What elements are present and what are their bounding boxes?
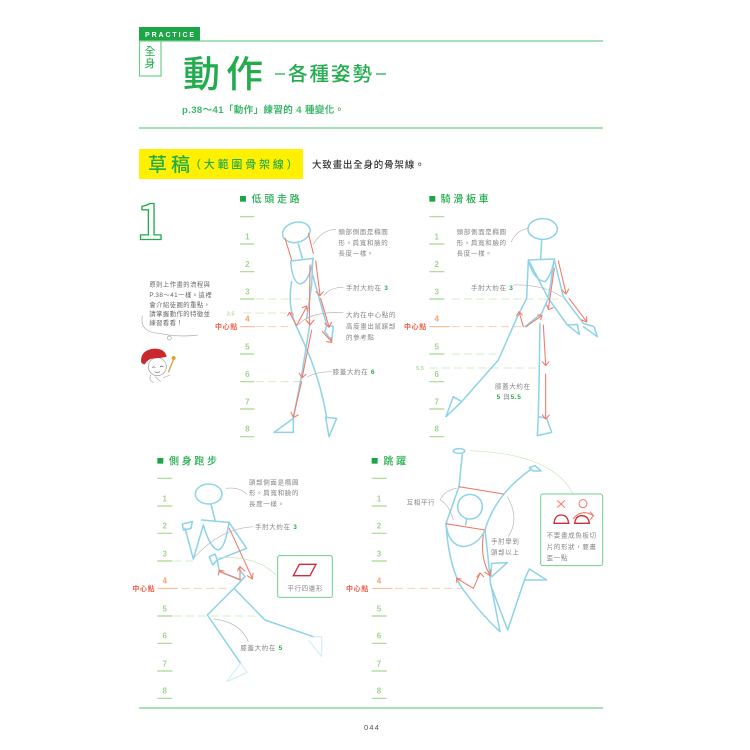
- heading: skateboard: 騎滑板車: [441, 193, 491, 206]
- leader lines: [193, 488, 277, 642]
- guide lines: [429, 299, 563, 368]
- ruler: 7: [162, 659, 167, 668]
- callout: shape tip: [541, 494, 603, 566]
- ruler: 7: [377, 659, 382, 668]
- annotation: elbow: [491, 536, 520, 556]
- annotation: groin: 高度畫出鼠蹊部: [346, 321, 396, 330]
- figure skeleton: [274, 219, 337, 437]
- ruler: [157, 478, 178, 698]
- red guide arrows: [517, 261, 587, 419]
- ruler: 6: [377, 632, 382, 641]
- annotation: head shape: [338, 227, 388, 258]
- title: 動作: [183, 54, 269, 95]
- ruler: [372, 478, 392, 698]
- ruler: 1: [377, 494, 382, 503]
- intro line: p.38～41「動作」練習的 4 種變化。: [182, 104, 345, 116]
- category tag: whole body: [140, 41, 161, 76]
- panel: jumping: [346, 449, 603, 698]
- heading: jump: [372, 455, 409, 468]
- ruler: 4: [245, 315, 250, 324]
- speech bubble text: 練習看看！: [149, 318, 183, 327]
- red guide arrows: [218, 528, 253, 580]
- category tag: whole body: 身: [144, 56, 156, 70]
- guide line: [395, 587, 463, 590]
- heading: running: 側身跑步: [169, 455, 220, 468]
- callout: parallelogram: [278, 556, 332, 597]
- speech bubble tail: [142, 316, 198, 340]
- annotation: head shape: 長度一樣。: [249, 499, 285, 508]
- section heading: draft: （大範圍骨架線）: [190, 157, 300, 171]
- ruler: 6: [162, 632, 167, 641]
- step number 1: 1: [136, 184, 164, 254]
- figure skeleton: [446, 449, 547, 632]
- panel: skateboarding: [404, 193, 597, 437]
- ruler: 8: [434, 425, 439, 434]
- label: center point: 中心點: [346, 584, 369, 593]
- annotation: parallel: 互相平行: [407, 497, 435, 506]
- panel: running sideways: [132, 455, 332, 698]
- annotation: head shape: 頭部側面是橢圓: [338, 227, 388, 236]
- annotation: groin: 大約在中心點的: [346, 310, 396, 319]
- page number: 044: [364, 723, 380, 732]
- figure skeleton: [446, 219, 597, 436]
- ruler: 4: [434, 315, 439, 324]
- divider: [139, 127, 603, 129]
- annotation: knee: 膝蓋大約在 6: [333, 367, 375, 376]
- annotation: head shape: 頭部側面是橢圓: [457, 227, 507, 236]
- ruler: 2: [162, 522, 167, 531]
- label: center point: 中心點: [132, 584, 155, 593]
- guide lines: [173, 561, 260, 616]
- red guide arrows: [446, 487, 503, 588]
- figure skeleton: [182, 484, 322, 682]
- guide lines: [243, 299, 317, 382]
- ruler: 3: [377, 549, 382, 558]
- ruler: 8: [377, 687, 382, 696]
- annotation: head shape: [249, 477, 299, 508]
- heading: jump: 跳躍: [383, 455, 409, 468]
- label: center point: 中心點: [404, 322, 427, 331]
- ruler: [227, 217, 255, 437]
- ruler: 2: [245, 260, 250, 269]
- annotation: elbow: 手肘大約在 3: [471, 283, 514, 292]
- ruler: 5: [162, 604, 167, 613]
- subtitle: 各種姿勢: [288, 64, 374, 86]
- ruler: 6: [434, 370, 439, 379]
- ruler: 5: [434, 342, 439, 351]
- annotation: head shape: 形。肩寬和臉的: [457, 238, 507, 247]
- annotation: elbow: 頭部以上: [491, 547, 520, 556]
- section description: 大致畫出全身的骨架線。: [312, 159, 425, 171]
- annotation: head shape: 形。肩寬和臉的: [338, 238, 388, 247]
- speech bubble text: 請掌握動作的特徵並: [149, 309, 210, 318]
- annotation: elbow: 手肘大約在 3: [255, 522, 298, 531]
- annotation: elbow: 手肘大約在 3: [346, 283, 389, 292]
- annotation: groin: [346, 310, 396, 341]
- category tag: whole body: 全: [144, 45, 156, 58]
- ruler: 3: [162, 549, 167, 558]
- leader lines: [440, 451, 573, 537]
- ruler: 1: [162, 494, 167, 503]
- annotation: head shape: 頭部側面是橢圓: [249, 477, 299, 486]
- annotation: knee: 膝蓋大約在 5: [240, 643, 283, 652]
- heading: walking: [240, 193, 302, 206]
- label: center point: 中心點: [215, 322, 238, 331]
- heading: running: [157, 455, 220, 468]
- annotation: knee: [495, 381, 531, 401]
- ruler: 3.5: [227, 311, 235, 317]
- ruler: 2: [434, 260, 439, 269]
- leader lines: [511, 228, 562, 297]
- ruler: 5: [245, 342, 250, 351]
- ruler: 1: [434, 232, 439, 241]
- heading: walking: 低頭走路: [252, 193, 302, 206]
- ruler: 4: [377, 577, 382, 586]
- annotation: knee: 膝蓋大約在: [495, 381, 531, 390]
- section heading: draft: [139, 149, 303, 179]
- callout: shape tip: 片的形狀，要畫: [547, 542, 597, 551]
- speech bubble text: P.38～41一樣。這裡: [149, 290, 212, 299]
- annotation: groin: 的參考點: [346, 332, 375, 341]
- ruler: 6: [245, 370, 250, 379]
- bottom rule: [139, 707, 603, 709]
- annotation: head shape: 形。肩寬和臉的: [249, 488, 299, 497]
- section heading: draft: 草稿: [148, 154, 194, 176]
- speech bubble text: 原則上作畫的流程與: [149, 280, 211, 289]
- ruler: 3: [245, 287, 250, 296]
- ruler: 5: [377, 604, 382, 613]
- ruler: 2: [377, 522, 382, 531]
- ruler: 8: [245, 425, 250, 434]
- ruler: 4: [162, 577, 167, 586]
- heading: skateboard: [429, 193, 491, 206]
- callout: parallelogram: 平行四邊形: [287, 584, 323, 593]
- annotation: elbow: 手肘舉到: [491, 536, 520, 545]
- callout: shape tip: 不要畫成魚板切: [547, 531, 597, 540]
- annotation: head shape: 長度一樣。: [338, 249, 374, 258]
- panel: walking with head down: [136, 184, 396, 437]
- speech bubble text: [149, 280, 212, 327]
- header: practice tag and rule: [139, 27, 603, 41]
- annotation: knee: 5 與5.5: [497, 392, 522, 401]
- ruler: 3: [434, 287, 439, 296]
- annotation: head shape: 長度一樣。: [457, 249, 492, 258]
- leader lines: [298, 229, 343, 377]
- ruler: 8: [162, 687, 167, 696]
- annotation: head shape: [457, 227, 507, 258]
- header: practice tag and rule: PRACTICE: [145, 32, 196, 39]
- ruler: 7: [245, 397, 250, 406]
- ruler: [416, 217, 450, 437]
- ruler: 5.5: [416, 366, 424, 372]
- mascot: [141, 349, 176, 382]
- speech bubble text: 會介紹徒圈的重點，: [149, 300, 210, 309]
- ruler: 1: [245, 232, 250, 241]
- ruler: 7: [434, 397, 439, 406]
- red guide arrows: [285, 233, 332, 417]
- callout: shape tip: 歪一點: [547, 553, 568, 562]
